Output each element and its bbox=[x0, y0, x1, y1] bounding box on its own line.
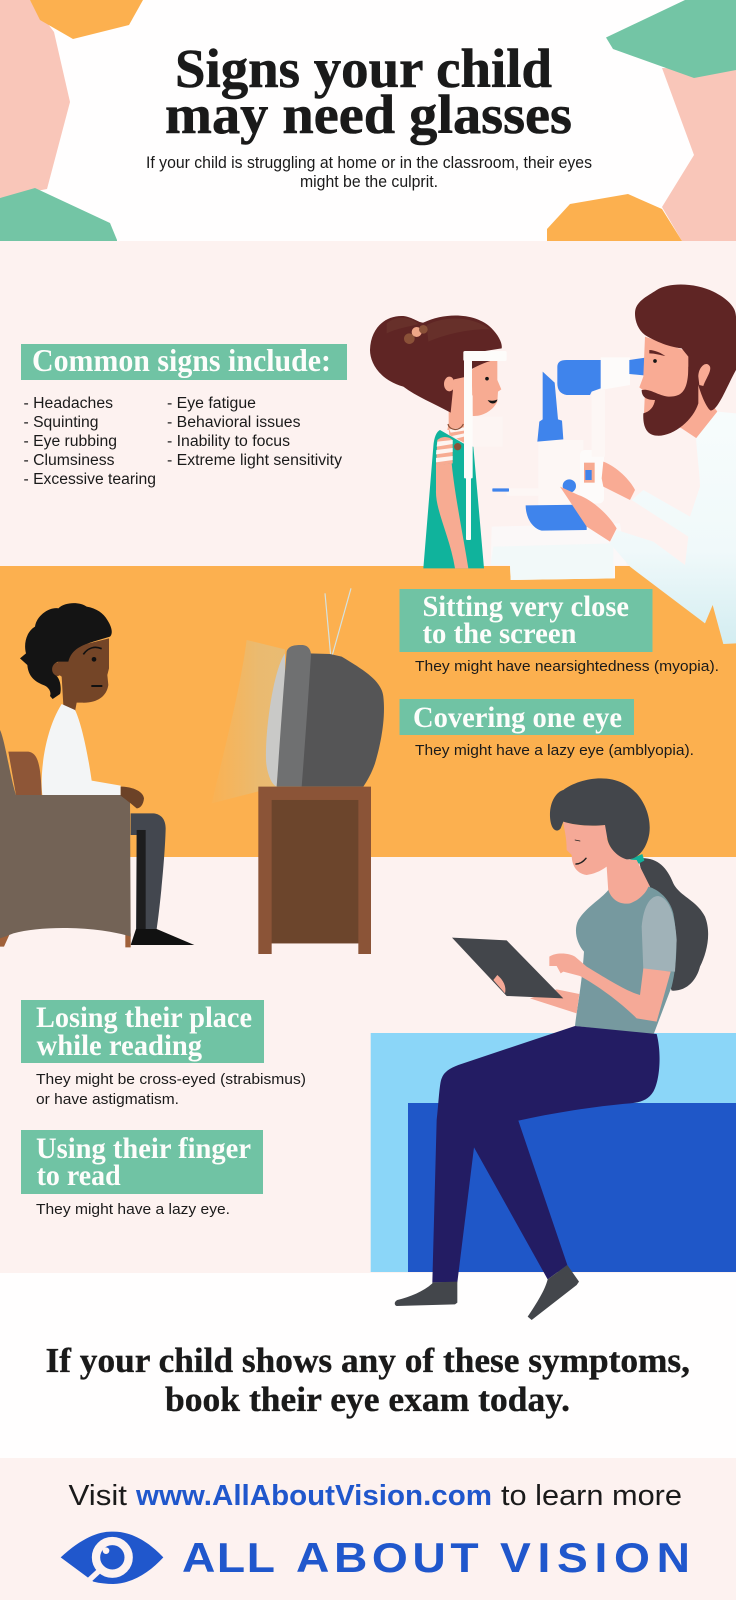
antennae bbox=[325, 588, 351, 655]
list column two: - Inability to focus bbox=[167, 433, 290, 450]
girl hair bbox=[370, 316, 502, 413]
panel: common signs bbox=[21, 342, 347, 488]
trousers bbox=[432, 1026, 660, 1282]
tv stand bbox=[258, 787, 371, 954]
call to action: book their eye exam today. bbox=[165, 1380, 570, 1419]
screen glow bbox=[212, 640, 285, 803]
girl neck and ear bbox=[443, 370, 473, 430]
doctor beard bbox=[642, 367, 698, 436]
girl ear bbox=[444, 377, 455, 391]
machine body bbox=[491, 357, 630, 580]
boy shoe bbox=[131, 929, 194, 945]
arms bbox=[530, 954, 671, 1022]
striped sleeve bbox=[436, 425, 464, 465]
call to action bbox=[46, 1341, 690, 1419]
visit line: www.AllAboutVision.com bbox=[135, 1480, 492, 1512]
tv bezel bbox=[277, 645, 311, 787]
list column one bbox=[24, 395, 156, 488]
illustration: boy in chair bbox=[0, 603, 194, 947]
illustration: girl at eye exam bbox=[370, 285, 736, 644]
shirt bbox=[575, 887, 676, 1035]
blue bench bbox=[371, 1033, 736, 1272]
panel: using their finger: to read bbox=[37, 1159, 121, 1192]
doctor coat bbox=[610, 412, 736, 644]
tv body bbox=[300, 653, 384, 787]
visit line: Visit bbox=[68, 1480, 127, 1512]
title: Signs your child bbox=[175, 38, 552, 99]
list column one: - Clumsiness bbox=[24, 452, 115, 469]
panel: losing their place: They might be cross-eyed (strabismus) bbox=[36, 1071, 306, 1088]
panel: losing their place: Losing their place bbox=[36, 1001, 252, 1034]
title: may need glasses bbox=[165, 84, 572, 145]
list column two: - Eye fatigue bbox=[167, 395, 256, 412]
girl arm bbox=[436, 463, 468, 568]
machine blue parts bbox=[492, 357, 650, 531]
subtitle: might be the culprit. bbox=[300, 173, 438, 191]
title bbox=[165, 38, 572, 145]
subtitle bbox=[146, 154, 592, 191]
doctor ear bbox=[698, 364, 710, 386]
boy shirt bbox=[42, 704, 121, 795]
panel: using their finger bbox=[21, 1130, 263, 1218]
woman legs bbox=[395, 1026, 660, 1320]
necklace bbox=[448, 424, 463, 430]
boy trousers bbox=[131, 813, 166, 929]
boy neck and face bbox=[52, 638, 109, 712]
doctor eye and brow bbox=[649, 350, 665, 363]
chair feet bbox=[0, 933, 131, 947]
scrunchie bbox=[404, 325, 428, 344]
panel: sitting close: Sitting very close bbox=[422, 590, 629, 623]
logo wordmark bbox=[182, 1535, 690, 1582]
illustration: television bbox=[212, 588, 384, 954]
socks bbox=[395, 1265, 579, 1320]
hair bbox=[550, 778, 650, 859]
tablet bbox=[452, 938, 563, 998]
thumb bbox=[493, 975, 505, 993]
hair band bbox=[630, 854, 644, 866]
list column one: - Headaches bbox=[24, 395, 113, 412]
list column two: - Behavioral issues bbox=[167, 414, 301, 431]
call to action: If your child shows any of these symptoms, bbox=[46, 1341, 690, 1380]
icon: eye logo bbox=[61, 1532, 163, 1584]
panel: sitting close: They might have nearsightedness (myopia). bbox=[415, 658, 719, 675]
panel: sitting close: to the screen bbox=[422, 617, 577, 650]
header decorative shapes bbox=[0, 0, 736, 241]
list column two bbox=[167, 395, 342, 469]
woman upper body bbox=[452, 778, 708, 1035]
girl face bbox=[472, 358, 501, 416]
joystick bbox=[584, 463, 595, 483]
panel: losing their place: or have astigmatism. bbox=[36, 1091, 179, 1108]
logo wordmark: ALL bbox=[182, 1535, 275, 1582]
panel: covering one eye bbox=[400, 699, 694, 759]
girl fringe bbox=[470, 355, 498, 370]
panel: sitting close bbox=[400, 589, 719, 675]
heading: Common signs include: bbox=[32, 342, 331, 378]
panel: using their finger: Using their finger bbox=[36, 1132, 251, 1165]
boy ear bbox=[51, 662, 62, 676]
panel: covering one eye: They might have a lazy eye (amblyopia). bbox=[415, 742, 694, 759]
girl eye and mouth bbox=[485, 377, 497, 403]
eye and smile bbox=[575, 840, 586, 864]
boy hair bbox=[20, 603, 112, 699]
ponytail bbox=[638, 858, 708, 991]
panel: covering one eye: Covering one eye bbox=[413, 701, 622, 734]
face and neck bbox=[563, 822, 650, 908]
sleeve bbox=[642, 896, 677, 972]
boy eye, brow and mouth bbox=[83, 647, 102, 687]
logo wordmark: VISION bbox=[500, 1535, 690, 1582]
doctor hands bbox=[560, 462, 635, 542]
panel: losing their place: while reading bbox=[37, 1029, 202, 1062]
logo wordmark: ABOUT bbox=[296, 1535, 479, 1582]
girl hair highlight bbox=[387, 318, 490, 342]
chair cushion bbox=[8, 752, 42, 795]
panel: using their finger: They might have a lazy eye. bbox=[36, 1201, 230, 1218]
subtitle: If your child is struggling at home or in the classroom, their eyes bbox=[146, 154, 592, 172]
tv screen bbox=[266, 653, 285, 787]
doctor neck and face bbox=[639, 337, 717, 438]
visit line bbox=[68, 1480, 682, 1512]
visit line: to learn more bbox=[501, 1480, 682, 1512]
illustration: woman with tablet bbox=[371, 778, 736, 1320]
list column one: - Eye rubbing bbox=[24, 433, 117, 450]
doctor hair bbox=[635, 285, 736, 411]
boy hand bbox=[121, 787, 144, 808]
list column two: - Extreme light sensitivity bbox=[167, 452, 342, 469]
girl dress bbox=[423, 430, 484, 568]
chair bbox=[0, 730, 131, 938]
list column one: - Squinting bbox=[24, 414, 98, 431]
chin rest bbox=[463, 351, 507, 540]
list column one: - Excessive tearing bbox=[24, 471, 156, 488]
panel: losing their place bbox=[21, 1000, 306, 1108]
